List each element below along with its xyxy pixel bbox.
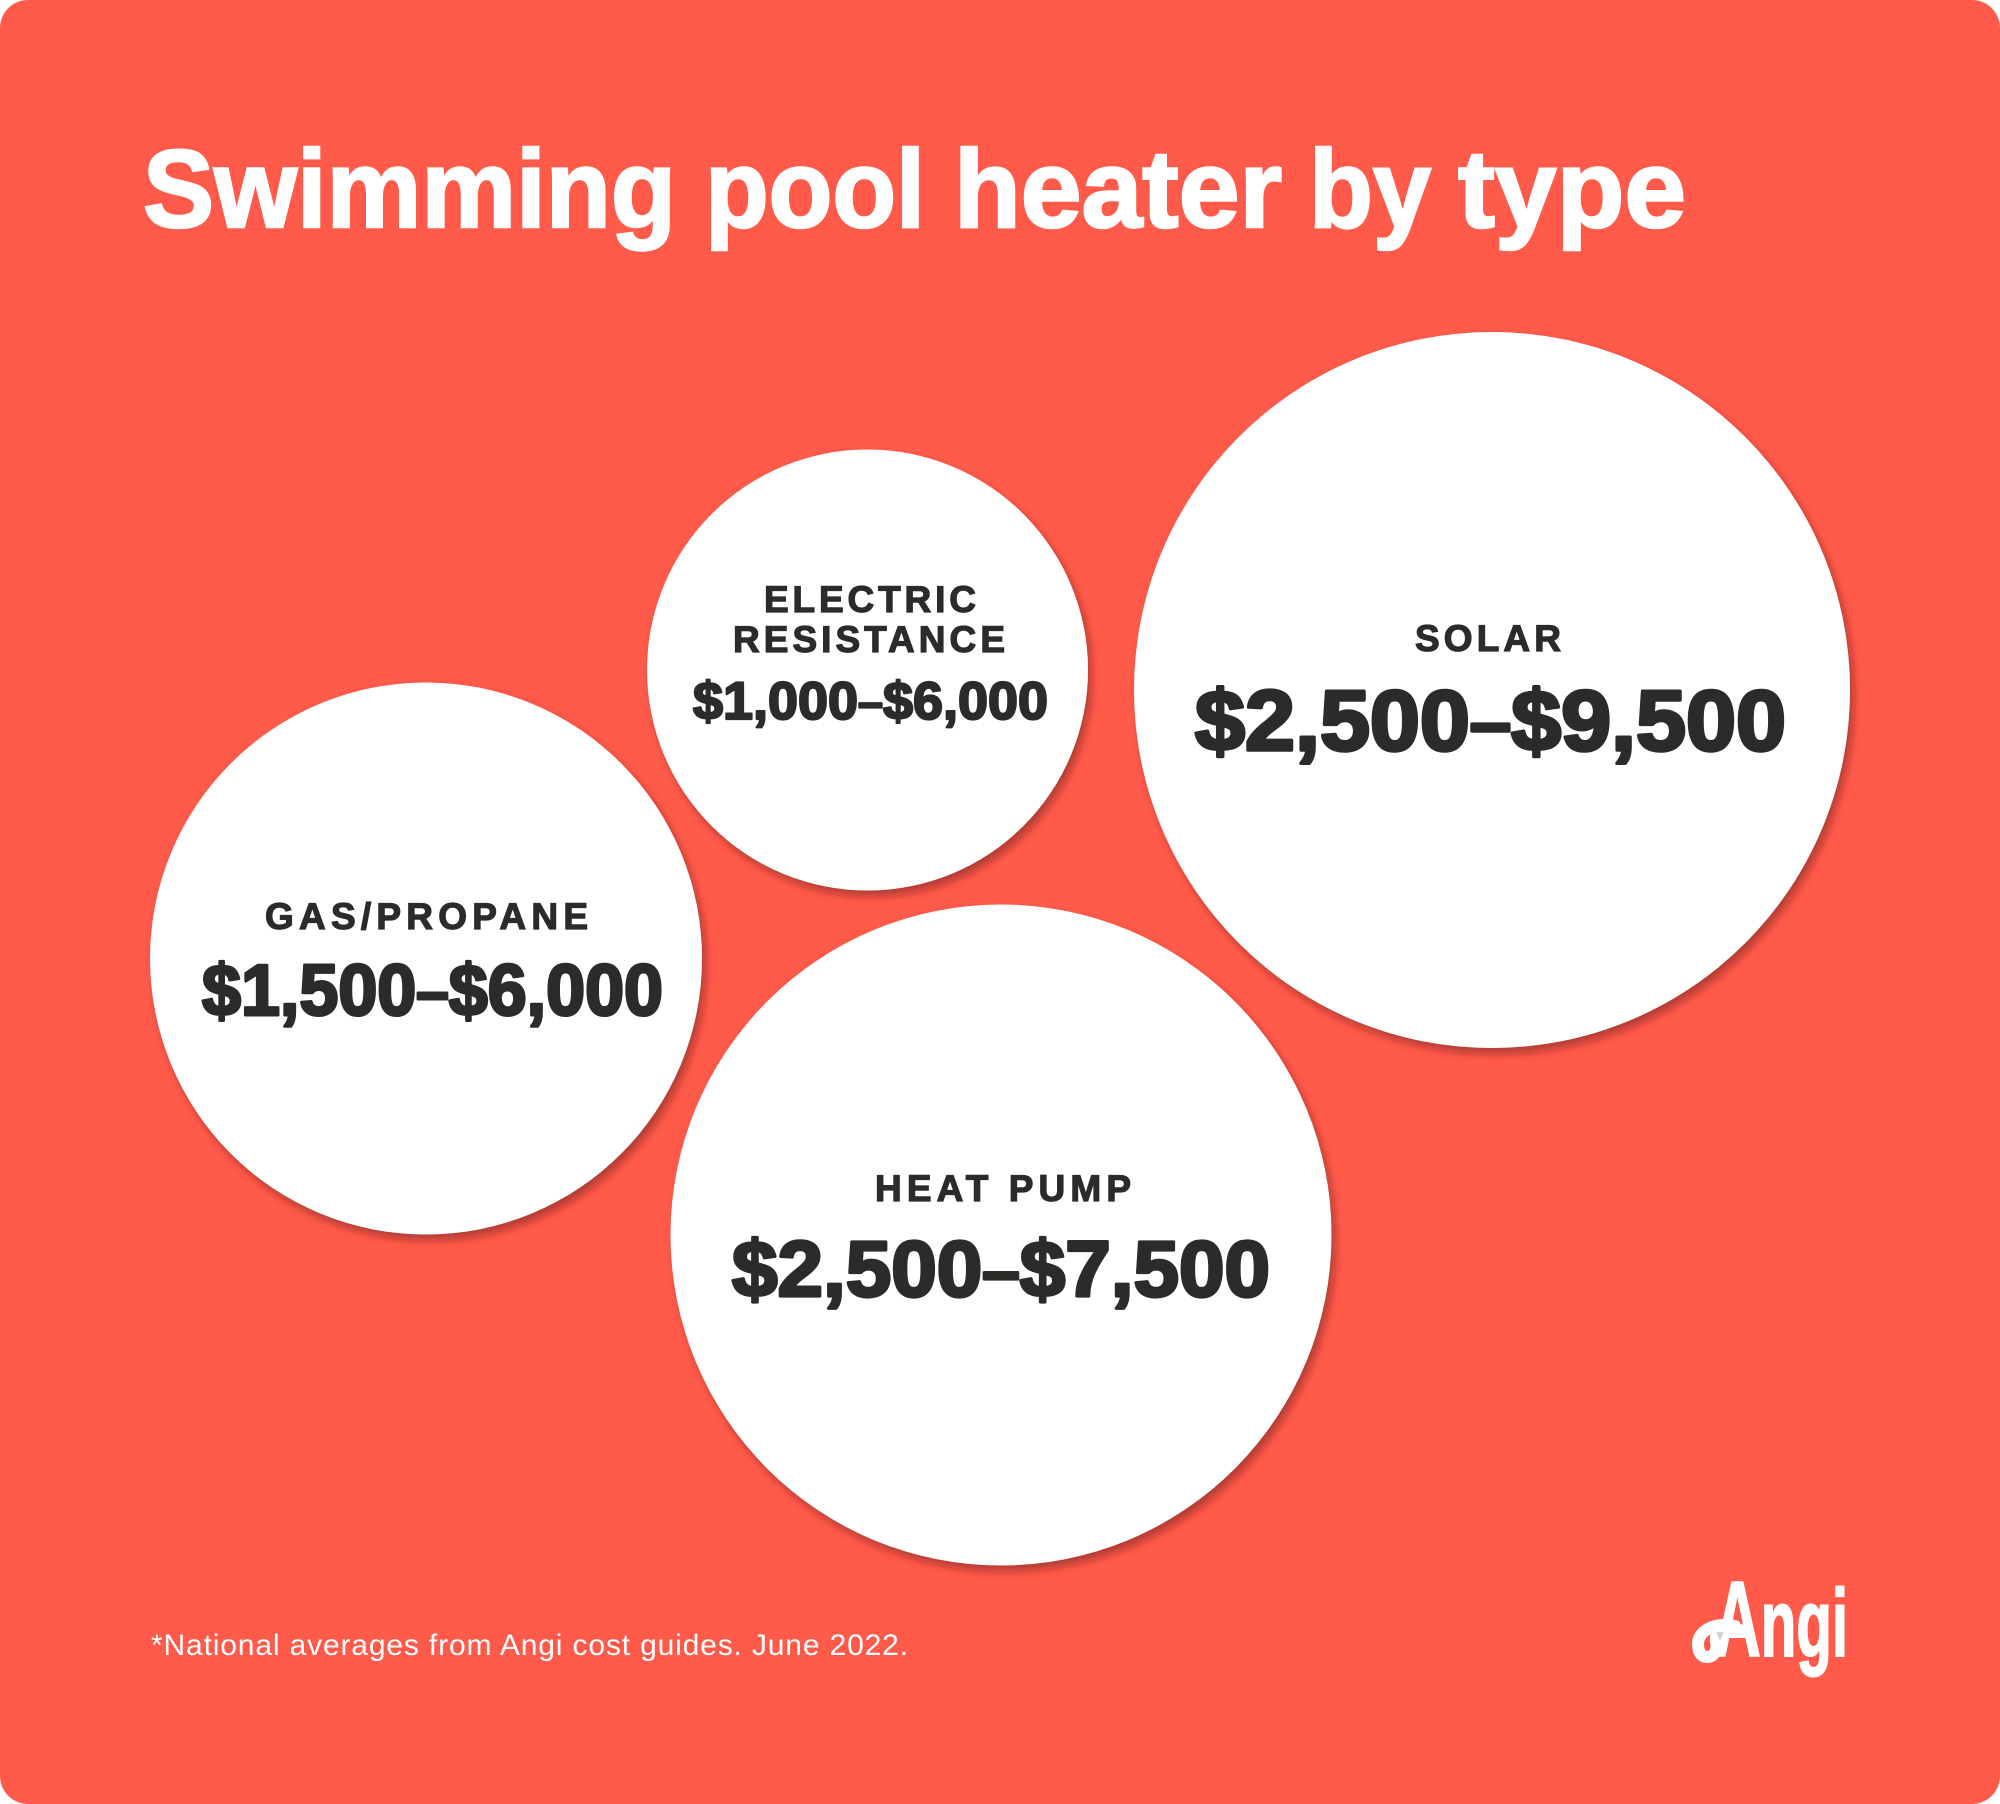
price: heat pump: $7,500 [1020,1224,1270,1313]
label: heat pump: HEAT PUMP [875,1168,1131,1209]
price: gas/propane: – [416,958,449,1025]
price: heat pump: – [982,1234,1020,1307]
price: electric resistance: $6,000 [883,672,1048,731]
price: solar: $9,500 [1511,674,1786,769]
title: Swimming [143,128,676,251]
logo: Angi [1698,1559,1848,1679]
bubble: solar [1134,332,1850,1048]
price: heat pump: $2,500 [732,1224,974,1313]
price: electric resistance: $1,000 [693,672,855,731]
logo: Angi: Angi [1714,1559,1848,1679]
price: solar: – [1470,683,1511,761]
label: electric resistance: RESISTANCE [733,619,1005,660]
title: type [1458,128,1686,251]
title: heater [954,128,1282,251]
price: solar: $2,500 [1195,674,1455,769]
bubble: electric resistance [647,450,1088,890]
label: solar: SOLAR [1415,618,1561,659]
title: pool [705,128,925,251]
price: gas/propane: $6,000 [449,951,663,1031]
price: gas/propane: $1,500 [202,951,422,1031]
footnote: *National averages from Angi cost guides. June 2022. [151,1629,908,1662]
bubble: gas/propane [150,682,702,1234]
label: gas/propane: GAS/PROPANE [265,896,588,937]
title: by [1309,128,1431,251]
label: electric resistance [733,579,1005,660]
label: electric resistance: ELECTRIC [764,579,976,620]
price: electric resistance: – [858,678,883,727]
bubble: heat pump [670,904,1332,1566]
